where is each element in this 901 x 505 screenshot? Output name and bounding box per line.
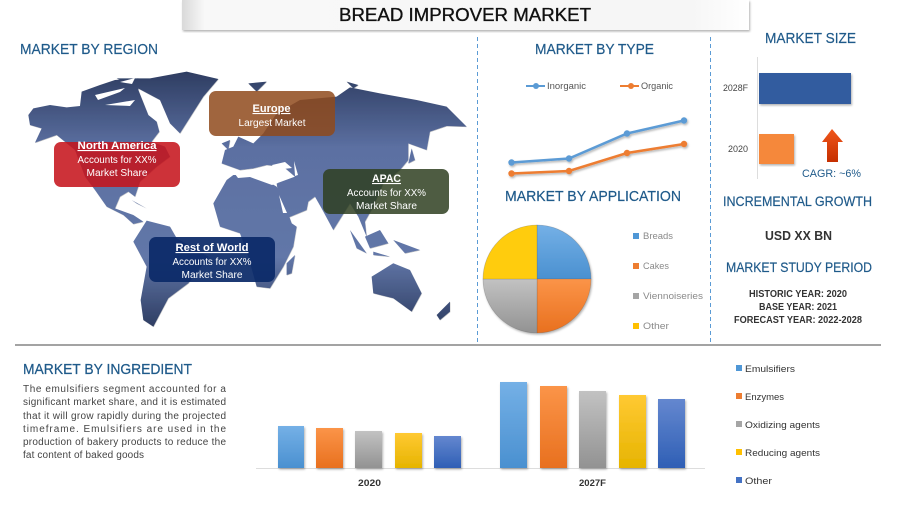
callout: Rest of World xyxy=(149,237,275,282)
legend: application: Breads xyxy=(643,231,673,242)
legend: type: Organic xyxy=(641,81,674,91)
description text: timeframe. Emulsifiers are used in the xyxy=(23,424,226,435)
heading: market by ingredient: MARKET BY INGREDIENT xyxy=(23,361,192,378)
bar chart: market size: 2028F xyxy=(723,83,748,94)
heading: market by type: MARKET BY TYPE xyxy=(535,41,654,58)
study period years xyxy=(734,289,862,326)
callout: North America: Market Share xyxy=(86,168,148,179)
callout: APAC: Market Share xyxy=(356,201,417,212)
heading: market size: MARKET SIZE xyxy=(765,30,856,47)
callout: North America xyxy=(54,140,180,187)
pie chart xyxy=(483,225,591,333)
description text: production of bakery products to reduce the xyxy=(23,437,226,448)
panel: market study period xyxy=(726,259,872,326)
legend: application: Other xyxy=(643,321,669,332)
callout: Europe: Largest Market xyxy=(238,118,306,129)
legend: ingredient: Other xyxy=(745,476,772,487)
heading: market by application: MARKET BY APPLICATION xyxy=(505,188,681,205)
description text: significant market share, and it is estimated xyxy=(23,397,226,408)
legend: application xyxy=(633,231,703,332)
description text: The emulsifiers segment accounted for a xyxy=(23,384,226,395)
callout: North America: North America xyxy=(78,140,157,152)
study period years: BASE YEAR: 2021 xyxy=(759,302,837,313)
bar chart: ingredient: 2027F xyxy=(579,478,606,489)
callout: APAC: APAC xyxy=(372,173,401,185)
panel: market size xyxy=(723,30,861,180)
panel: market by application xyxy=(483,188,703,333)
panel: market by ingredient xyxy=(23,361,820,489)
legend: ingredient: Emulsifiers xyxy=(745,364,795,375)
callout: APAC xyxy=(323,169,449,214)
bar chart: ingredient: 2020 xyxy=(358,478,381,489)
legend: ingredient xyxy=(736,364,820,487)
line chart: type xyxy=(508,117,687,177)
legend: type: Inorganic xyxy=(547,81,587,91)
callout: Rest of World: Market Share xyxy=(182,270,243,281)
panel: incremental growth xyxy=(723,193,872,243)
legend: ingredient: Oxidizing agents xyxy=(745,420,820,431)
arrow: growth xyxy=(822,129,843,162)
description text: fat content of baked goods xyxy=(23,450,144,461)
study period years: FORECAST YEAR: 2022-2028 xyxy=(734,315,862,326)
description text xyxy=(23,384,226,461)
description text: that it will grow rapidly during the projected xyxy=(23,411,226,422)
world map xyxy=(28,72,467,327)
callout: North America: Accounts for XX% xyxy=(78,155,157,166)
callout: APAC: Accounts for XX% xyxy=(347,188,426,199)
panel: market by region xyxy=(20,41,467,327)
title banner xyxy=(182,0,749,30)
bar chart: ingredient xyxy=(256,382,705,489)
legend: ingredient: Enzymes xyxy=(745,392,784,403)
bar chart: market size xyxy=(723,57,851,179)
callout: Rest of World: Accounts for XX% xyxy=(172,257,252,268)
title: BREAD IMPROVER MARKET xyxy=(339,5,591,25)
heading: market study period: MARKET STUDY PERIOD xyxy=(726,259,872,275)
inland seas xyxy=(95,78,298,213)
value: incremental growth: USD XX BN xyxy=(765,228,832,243)
panel: market by type xyxy=(508,41,687,177)
bar chart: market size: 2020 xyxy=(728,144,748,155)
heading: incremental growth: INCREMENTAL GROWTH xyxy=(723,193,872,209)
legend: application: Cakes xyxy=(643,261,669,272)
legend: application: Viennoiseries xyxy=(643,291,703,302)
study period years: HISTORIC YEAR: 2020 xyxy=(749,289,847,300)
callout: Rest of World: Rest of World xyxy=(176,242,248,254)
heading: market by region: MARKET BY REGION xyxy=(20,41,158,58)
legend: type xyxy=(526,81,674,91)
callout: Europe xyxy=(209,91,335,136)
callout: Europe: Europe xyxy=(252,103,290,115)
CAGR label: CAGR: ~6% xyxy=(802,168,861,180)
legend: ingredient: Reducing agents xyxy=(745,448,820,459)
